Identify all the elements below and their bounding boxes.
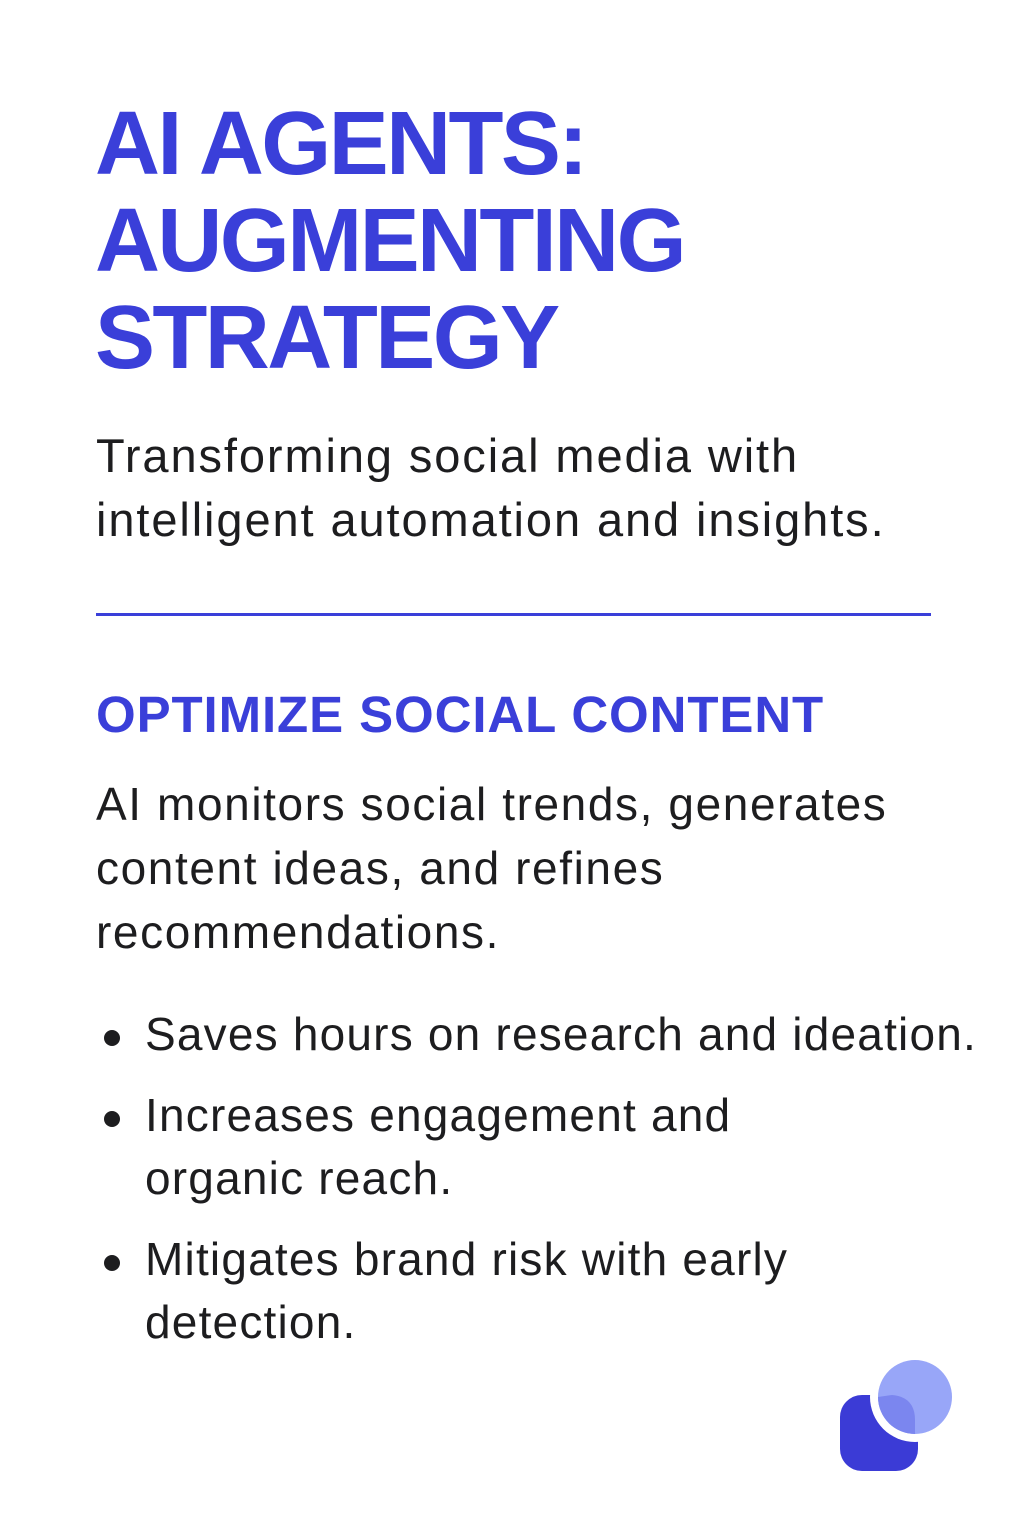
subtitle: intelligent automation and insights. [96, 493, 886, 546]
body text: content ideas, and refines [96, 842, 664, 894]
title [95, 94, 684, 388]
body text: AI monitors social trends, generates [96, 778, 887, 830]
icon: logo [840, 1360, 952, 1471]
divider line [96, 613, 931, 616]
title: STRATEGY [95, 288, 558, 388]
body text [96, 778, 887, 958]
title: AUGMENTING [95, 191, 684, 291]
section heading: OPTIMIZE SOCIAL CONTENT [96, 686, 824, 743]
subtitle: Transforming social media with [96, 429, 799, 482]
subtitle [96, 429, 886, 546]
bullet 3 [104, 1233, 788, 1348]
bullet list [104, 1008, 977, 1348]
body text: recommendations. [96, 906, 500, 958]
bullet 2: Increases engagement and [145, 1089, 731, 1141]
bullet 3: detection. [145, 1296, 356, 1348]
bullet 3: Mitigates brand risk with early [145, 1233, 788, 1285]
title: AI AGENTS: [95, 94, 586, 194]
bullet 2 [104, 1089, 731, 1204]
bullet 2: organic reach. [145, 1152, 453, 1204]
bullet 1: Saves hours on research and ideation. [145, 1008, 977, 1060]
